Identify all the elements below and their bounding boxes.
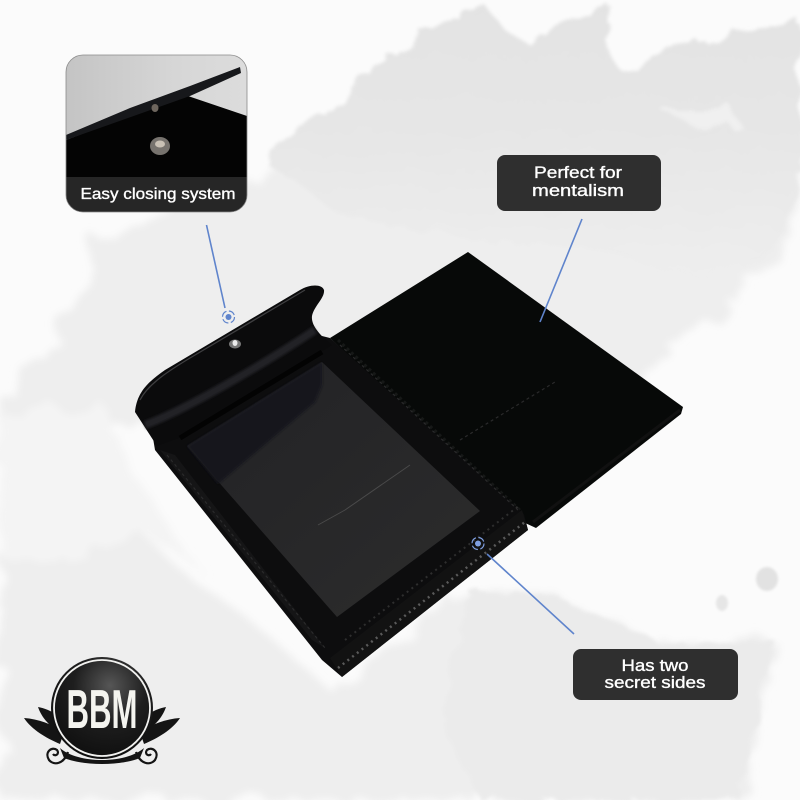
wallet left panel <box>150 336 528 677</box>
arrow: secret sides leader line <box>472 538 574 634</box>
arrow: closing system leader line <box>206 225 234 323</box>
callout: perfect for mentalism: mentalism <box>532 182 624 200</box>
wallet textured bottom band <box>330 510 528 677</box>
wallet textured left frame <box>160 450 325 648</box>
logo lettering: BBM <box>66 678 138 740</box>
callout: has two secret sides: Has two <box>622 657 688 675</box>
arrow: mentalism leader line <box>540 219 582 322</box>
glass window <box>187 362 480 617</box>
callout: perfect for mentalism <box>497 155 661 211</box>
logo wings and scrolls <box>24 707 180 764</box>
logo: BBM <box>24 657 180 764</box>
callout: easy closing system <box>66 55 247 212</box>
wallet flap <box>135 286 332 446</box>
callout caption: Easy closing system <box>80 186 235 203</box>
wallet snap button <box>229 340 241 348</box>
wallet product photo <box>135 252 683 677</box>
logo badge <box>51 657 153 759</box>
callout: perfect for mentalism: Perfect for <box>534 164 623 182</box>
callout photo <box>66 55 247 212</box>
wallet stitching <box>167 345 555 668</box>
callout: has two secret sides <box>573 649 738 700</box>
wallet right panel <box>330 252 683 528</box>
callout: has two secret sides: secret sides <box>604 674 706 692</box>
